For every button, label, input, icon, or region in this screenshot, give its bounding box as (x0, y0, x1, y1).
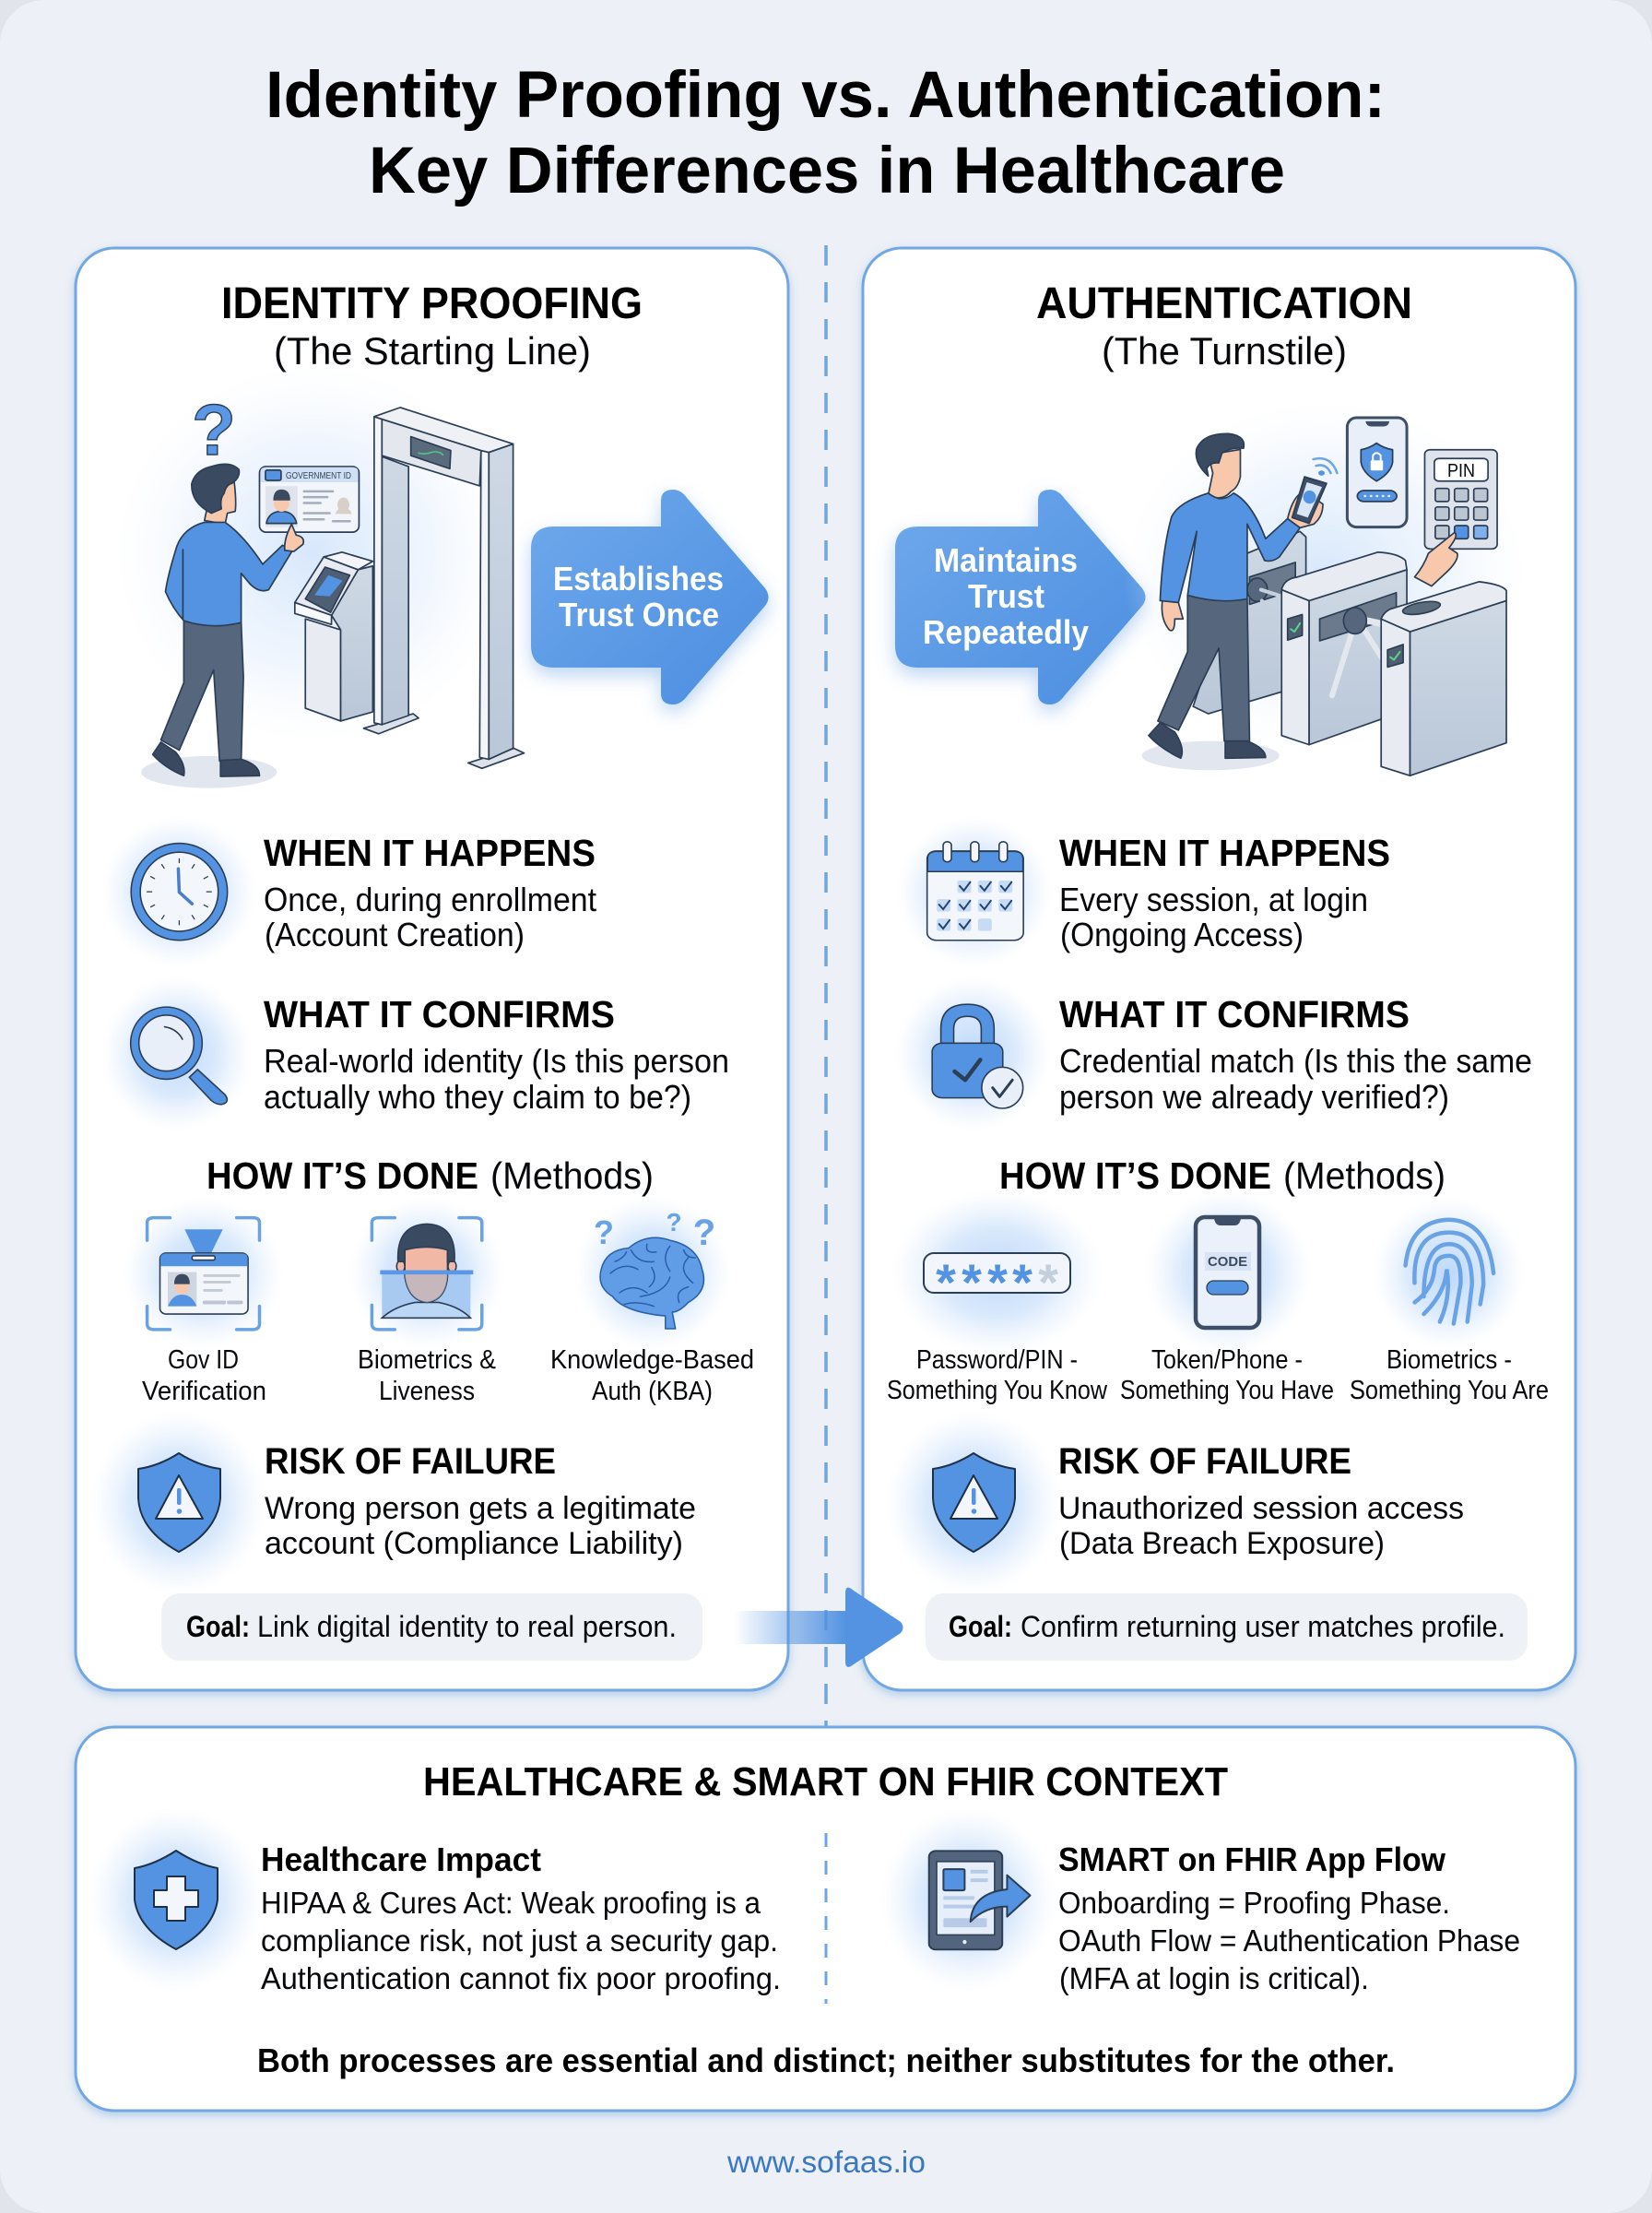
arrow: maintains trust repeatedly: Maintains (934, 541, 1078, 579)
arrow: maintains trust repeatedly: Trust (968, 577, 1044, 615)
heading: healthcare context: HEALTHCARE & SMART ON FHIR CONTEXT (423, 1759, 1228, 1805)
heading: authentication: AUTHENTICATION (1036, 279, 1412, 328)
title: Key Differences in Healthcare (369, 135, 1285, 207)
icon: government id scan (123, 1198, 283, 1349)
label: token (1120, 1345, 1334, 1405)
text: risk of failure: Unauthorized session access (1058, 1491, 1464, 1526)
icon: padlock with check (895, 976, 1051, 1131)
heading: how it's done: HOW IT’S DONE (999, 1154, 1271, 1197)
label: password (887, 1345, 1108, 1405)
text: when it happens: Every session, at login (1059, 881, 1368, 918)
text: what it confirms: WHAT IT CONFIRMS (1059, 993, 1410, 1035)
icon: fingerprint (1374, 1198, 1525, 1349)
heading: how it's done (206, 1154, 654, 1197)
icon: magnifier (101, 976, 253, 1131)
title (266, 59, 1386, 207)
icon: password field: * (936, 1253, 956, 1311)
title: Identity Proofing vs. Authentication: (266, 59, 1386, 132)
text: smart on fhir flow: (MFA at login is critical). (1059, 1961, 1369, 1995)
heading: how it's done: HOW IT’S DONE (206, 1154, 478, 1197)
text: what it confirms: person we already verified?) (1059, 1078, 1449, 1116)
label: gov id verification: Gov ID (168, 1345, 239, 1375)
label: knowledge-based auth: Knowledge-Based (550, 1345, 754, 1375)
icon: brain with question marks: ? (693, 1213, 715, 1253)
arrow: establishes trust once: Trust Once (559, 596, 719, 633)
icon: password field: * (987, 1253, 1008, 1311)
callout: goal: Goal: (949, 1610, 1012, 1643)
text: risk of failure: (Data Breach Exposure) (1059, 1526, 1385, 1561)
panel: identity proofing (76, 248, 788, 1690)
label: token: Something You Have (1120, 1376, 1334, 1405)
footer url: www.sofaas.io (726, 2145, 926, 2179)
icon: password field: * (1012, 1253, 1032, 1311)
heading: identity proofing: IDENTITY PROOFING (221, 279, 643, 328)
icon: brain with question marks (574, 1196, 730, 1351)
text: risk of failure: RISK OF FAILURE (265, 1441, 556, 1482)
icon: medical shield (88, 1807, 264, 1992)
inner dashed divider (824, 1833, 828, 2004)
icon: biometric face scan (348, 1198, 505, 1349)
text: risk of failure: RISK OF FAILURE (1058, 1441, 1351, 1482)
text: what it confirms: actually who they claim to be?) (264, 1078, 691, 1116)
callout: goal (161, 1593, 702, 1661)
callout: goal: Link digital identity to real person. (257, 1610, 677, 1643)
text: when it happens: (Ongoing Access) (1060, 916, 1304, 953)
text: smart on fhir flow (1058, 1840, 1520, 1995)
text: when it happens (1059, 832, 1390, 953)
label: password: Something You Know (887, 1376, 1108, 1405)
label: biometrics: Something You Are (1350, 1376, 1549, 1405)
label: gov id verification: Verification (142, 1377, 266, 1406)
text: healthcare impact: compliance risk, not just a security gap. (261, 1923, 778, 1958)
icon: password field: * (1038, 1253, 1058, 1311)
icon: tablet with arrow (880, 1807, 1056, 1992)
panel: healthcare context (76, 1727, 1575, 2111)
illustration: person at identity gate (115, 363, 525, 788)
text: when it happens (264, 832, 596, 953)
arrow: maintains trust repeatedly: Repeatedly (923, 613, 1089, 651)
left column rows (91, 816, 754, 1661)
text: when it happens: WHEN IT HAPPENS (1059, 832, 1390, 874)
text: healthcare impact: Authentication cannot fix poor proofing. (261, 1961, 781, 1995)
arrow: establishes trust once (531, 490, 769, 704)
icon: brain with question marks: ? (666, 1208, 682, 1237)
heading: authentication: (The Turnstile) (1102, 329, 1347, 373)
text: when it happens: (Account Creation) (265, 916, 525, 953)
text: what it confirms (264, 993, 729, 1116)
label: biometrics and liveness (358, 1345, 496, 1406)
arrow: establishes trust once: Establishes (553, 560, 724, 598)
heading: how it's done (999, 1154, 1446, 1197)
text: risk of failure (1058, 1441, 1464, 1561)
keypad label: PIN (1447, 461, 1475, 481)
text: what it confirms: WHAT IT CONFIRMS (264, 993, 615, 1035)
text: risk of failure: account (Compliance Liability) (265, 1526, 683, 1561)
callout: goal: Confirm returning user matches profile. (1021, 1610, 1505, 1643)
icon: phone with code: CODE (1208, 1254, 1247, 1270)
callout: goal: Goal: (186, 1610, 250, 1643)
text: smart on fhir flow: SMART on FHIR App Flow (1058, 1840, 1446, 1878)
arrow: between goals (734, 1588, 903, 1667)
label: biometrics (1350, 1345, 1549, 1405)
heading: identity proofing (221, 279, 643, 373)
label: token: Token/Phone - (1151, 1345, 1303, 1375)
icon: brain with question marks: ? (594, 1213, 614, 1251)
heading: authentication (1036, 279, 1412, 373)
text: risk of failure (265, 1441, 696, 1561)
text: what it confirms: Credential match (Is this the same (1059, 1042, 1532, 1080)
id card label: GOVERNMENT ID (286, 471, 351, 481)
icon: clock (101, 816, 257, 967)
panel: authentication (863, 248, 1575, 1690)
icon: calendar (896, 816, 1052, 967)
closing statement: Both processes are essential and distinct; neither substitutes for the other. (257, 2041, 1395, 2079)
text: smart on fhir flow: OAuth Flow = Authentication Phase (1058, 1923, 1520, 1958)
icon: warning shield (91, 1411, 266, 1595)
icon: password field (891, 1189, 1103, 1355)
icon: phone with code (1145, 1189, 1311, 1355)
heading: identity proofing: (The Starting Line) (274, 329, 591, 373)
text: when it happens: Once, during enrollment (264, 881, 596, 918)
label: biometrics and liveness: Biometrics & (358, 1345, 496, 1375)
text: when it happens: WHEN IT HAPPENS (264, 832, 596, 874)
center dashed divider (824, 245, 828, 1727)
arrow: maintains trust repeatedly (895, 490, 1145, 704)
heading: how it's done: (Methods) (490, 1154, 654, 1197)
text: healthcare impact (261, 1840, 781, 1995)
label: gov id verification (142, 1345, 266, 1406)
text: smart on fhir flow: Onboarding = Proofing Phase. (1058, 1886, 1450, 1920)
text: healthcare impact: HIPAA & Cures Act: Weak proofing is a (261, 1886, 761, 1920)
label: knowledge-based auth: Auth (KBA) (592, 1377, 713, 1406)
callout: goal (926, 1593, 1528, 1661)
icon: password field: * (962, 1253, 982, 1311)
heading: how it's done: (Methods) (1283, 1154, 1446, 1197)
illustration: person at turnstile (1124, 400, 1527, 775)
icon: warning shield (886, 1411, 1061, 1595)
text: what it confirms (1059, 993, 1532, 1116)
label: password: Password/PIN - (916, 1345, 1078, 1375)
label: biometrics: Biometrics - (1386, 1345, 1512, 1375)
icon: question mark: ? (192, 389, 236, 470)
text: what it confirms: Real-world identity (Is this person (264, 1042, 729, 1080)
label: knowledge-based auth (550, 1345, 754, 1406)
right column rows (886, 816, 1549, 1661)
text: risk of failure: Wrong person gets a legitimate (265, 1491, 696, 1526)
text: healthcare impact: Healthcare Impact (261, 1840, 541, 1878)
label: biometrics and liveness: Liveness (379, 1377, 475, 1406)
